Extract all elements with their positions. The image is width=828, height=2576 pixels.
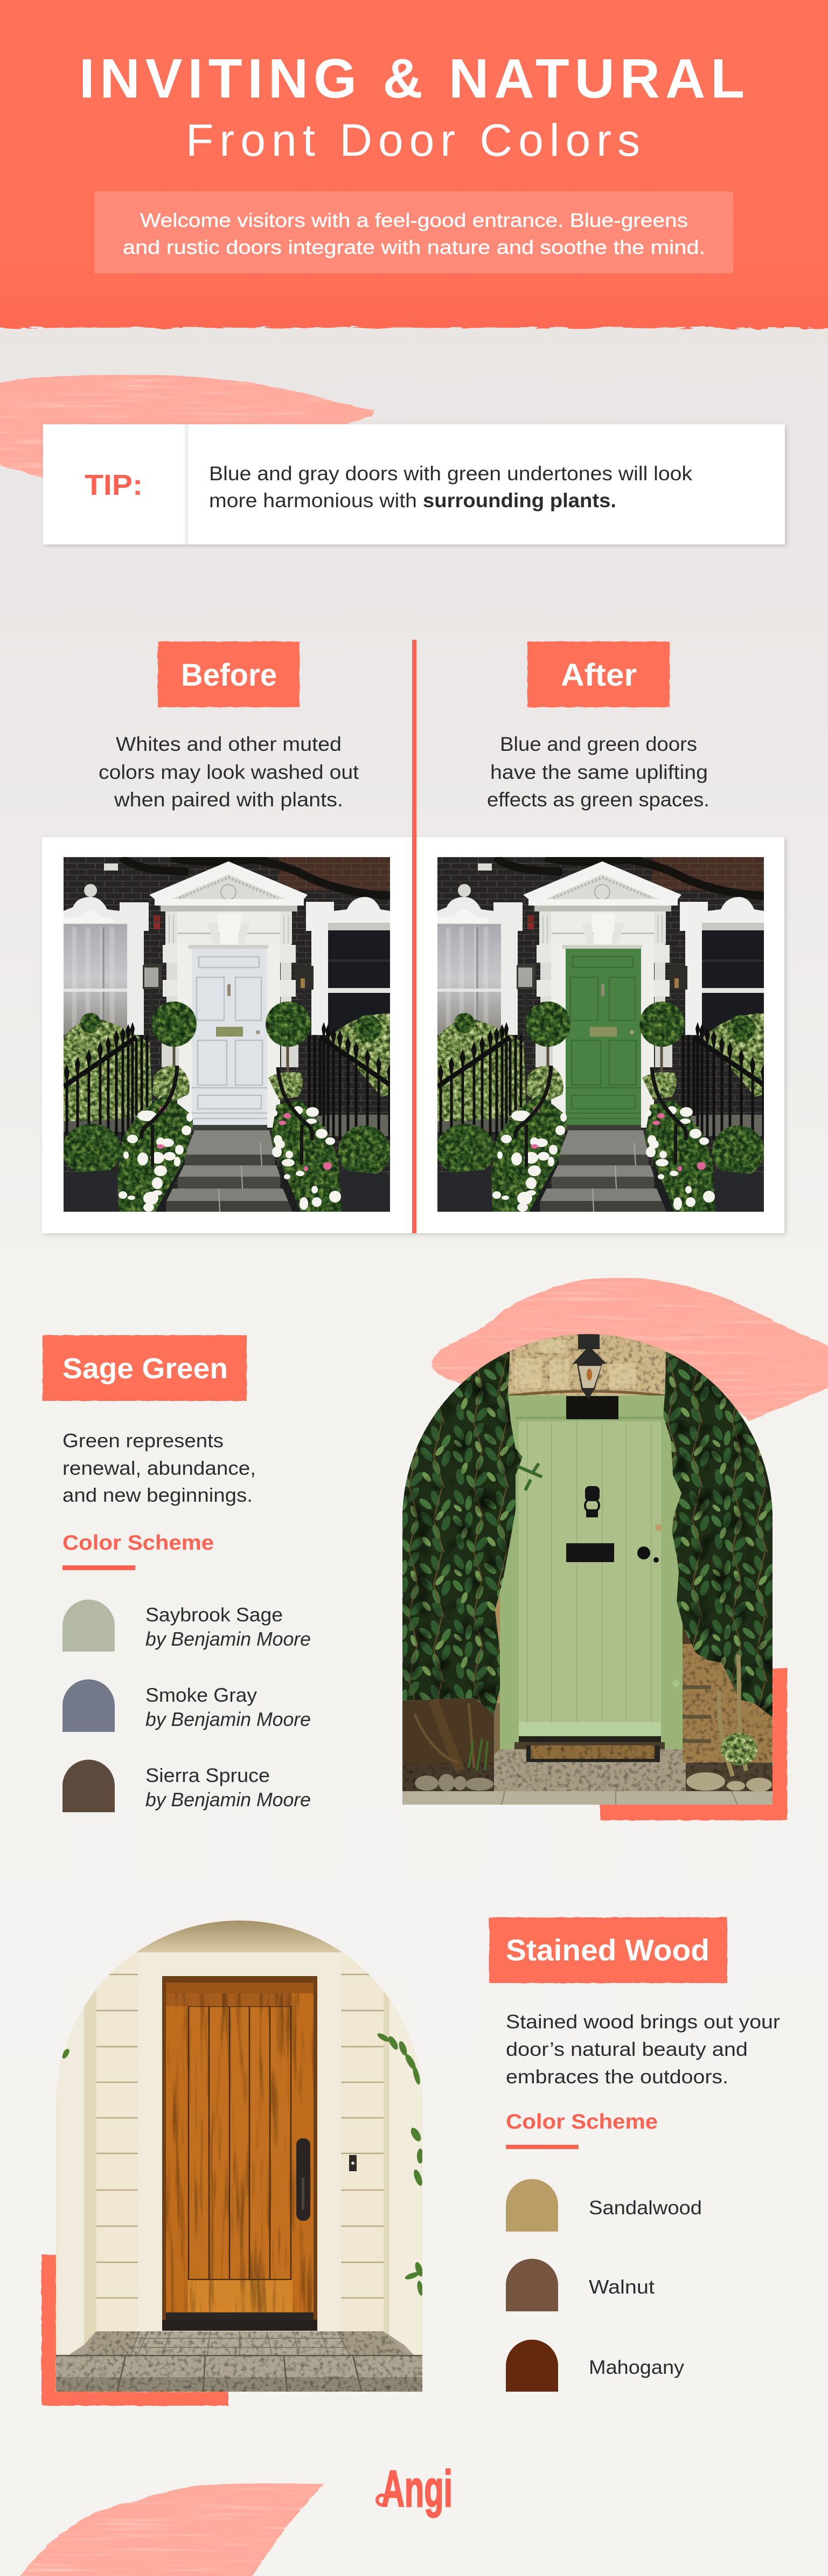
after text: have the same uplifting bbox=[490, 761, 708, 783]
sage green text: and new beginnings. bbox=[62, 1484, 253, 1506]
stained wood text bbox=[506, 2011, 780, 2088]
tip text: more harmonious with bbox=[209, 489, 417, 512]
tip text: surrounding plants. bbox=[423, 489, 616, 512]
before text: when paired with plants. bbox=[114, 789, 343, 811]
photo: before white door bbox=[62, 857, 393, 1212]
swatch: smoke gray bbox=[62, 1680, 311, 1732]
sage green text: renewal, abundance, bbox=[62, 1457, 256, 1479]
before heading: Before bbox=[181, 658, 277, 693]
before text bbox=[99, 733, 359, 811]
swatch: sandalwood: Sandalwood bbox=[589, 2197, 702, 2219]
stained wood text: embraces the outdoors. bbox=[506, 2066, 728, 2088]
before text: colors may look washed out bbox=[99, 761, 359, 783]
heading: stained wood: Stained Wood bbox=[506, 1933, 709, 1967]
tip text bbox=[209, 462, 693, 512]
stained wood text: Stained wood brings out your bbox=[506, 2011, 780, 2033]
photo: stained wood door in arch bbox=[56, 1921, 425, 2392]
heading: stained wood bbox=[489, 1917, 727, 1983]
swatch: walnut: Walnut bbox=[589, 2276, 655, 2298]
after heading: After bbox=[561, 658, 637, 693]
heading: sage green: Sage Green bbox=[62, 1352, 228, 1385]
color scheme heading: wood: Color Scheme bbox=[506, 2110, 658, 2133]
color scheme heading: wood bbox=[506, 2110, 658, 2149]
swatch: walnut bbox=[506, 2259, 655, 2311]
tip text: Blue and gray doors with green undertones will look bbox=[209, 462, 693, 485]
logo: Angi: Angi bbox=[381, 2460, 453, 2518]
swatch: sierra spruce: Sierra Spruce bbox=[145, 1764, 270, 1786]
swatch: sierra spruce bbox=[62, 1760, 311, 1812]
tip label: TIP: bbox=[85, 469, 143, 501]
stained wood text: door’s natural beauty and bbox=[506, 2038, 748, 2060]
brush stroke: tip background bbox=[0, 375, 375, 479]
swatch: mahogany: Mahogany bbox=[589, 2356, 684, 2378]
red corner accent: wood photo bbox=[41, 2255, 228, 2406]
swatch: saybrook sage bbox=[62, 1600, 311, 1652]
intro callout: and rustic doors integrate with nature and soothe the mind. bbox=[123, 236, 705, 258]
title: INVITING & NATURAL bbox=[79, 47, 744, 109]
brush stroke: bottom bbox=[16, 2483, 323, 2576]
swatch: mahogany bbox=[506, 2339, 684, 2392]
photo: sage green door in arch bbox=[399, 1331, 776, 1805]
after text: effects as green spaces. bbox=[487, 789, 709, 811]
subtitle: Front Door Colors bbox=[186, 115, 640, 165]
before text: Whites and other muted bbox=[116, 733, 342, 755]
photo: after green door bbox=[436, 857, 767, 1212]
after heading bbox=[527, 641, 670, 707]
panel: before and after photos bbox=[42, 837, 784, 1233]
heading: sage green bbox=[43, 1335, 247, 1401]
swatch: saybrook sage: Saybrook Sage bbox=[145, 1604, 283, 1626]
vertical divider bbox=[412, 640, 416, 1233]
color scheme heading: sage bbox=[62, 1531, 214, 1570]
swatch: sandalwood bbox=[506, 2179, 702, 2232]
header banner bbox=[0, 0, 828, 328]
swatch: sierra spruce: by Benjamin Moore bbox=[145, 1788, 311, 1811]
intro callout bbox=[94, 191, 733, 273]
before heading bbox=[158, 641, 300, 707]
color scheme heading: sage: Color Scheme bbox=[62, 1531, 214, 1555]
intro callout: Welcome visitors with a feel-good entrance. Blue-greens bbox=[140, 209, 688, 231]
swatch: smoke gray: Smoke Gray bbox=[145, 1684, 257, 1706]
swatch: smoke gray: by Benjamin Moore bbox=[145, 1708, 311, 1730]
after text: Blue and green doors bbox=[500, 733, 697, 755]
swatch: saybrook sage: by Benjamin Moore bbox=[145, 1628, 311, 1650]
sage green text: Green represents bbox=[62, 1429, 224, 1452]
brush stroke: sage section bbox=[432, 1278, 828, 1421]
after text bbox=[487, 733, 709, 811]
red corner accent: sage photo bbox=[600, 1668, 787, 1820]
sage green text bbox=[62, 1429, 256, 1506]
logo: Angi bbox=[377, 2460, 453, 2518]
panel: tip bbox=[43, 424, 785, 544]
